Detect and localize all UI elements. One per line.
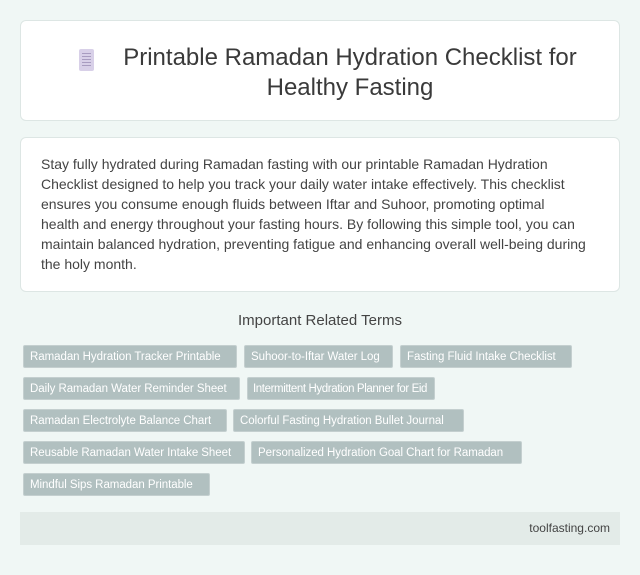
description text: [41, 156, 586, 272]
tags: Intermittent Hydration Planner for Eid: [253, 383, 427, 395]
tags: Mindful Sips Ramadan Printable: [30, 479, 193, 491]
description text: the holy month.: [41, 256, 137, 272]
description panel: [20, 137, 620, 292]
tags: Daily Ramadan Water Reminder Sheet: [30, 383, 227, 395]
tags: Fasting Fluid Intake Checklist: [407, 351, 556, 363]
tags: Suhoor-to-Iftar Water Log: [251, 351, 380, 363]
footer source text: toolfasting.com: [529, 521, 610, 535]
icon: document: [79, 49, 94, 71]
header panel: [20, 20, 620, 121]
title: Printable Ramadan Hydration Checklist for: [123, 44, 577, 71]
tags: Ramadan Hydration Tracker Printable: [30, 351, 221, 363]
title: [123, 44, 577, 101]
tags: Reusable Ramadan Water Intake Sheet: [30, 447, 231, 459]
tags: Colorful Fasting Hydration Bullet Journal: [240, 415, 444, 427]
tags: Ramadan Electrolyte Balance Chart: [30, 415, 211, 427]
title: Healthy Fasting: [267, 74, 433, 101]
description text: ensures you consume enough fluids between Iftar and Suhoor, promoting optimal: [41, 196, 545, 212]
related terms heading: Important Related Terms: [238, 312, 402, 329]
description text: maintain balanced hydration, preventing fatigue and enhancing overall well-being during: [41, 236, 586, 252]
description text: Checklist designed to help you track your daily water intake effectively. This checklist: [41, 176, 565, 192]
description text: health and energy throughout your fasting hours. By following this simple tool, you can: [41, 216, 575, 232]
tags: Personalized Hydration Goal Chart for Ramadan: [258, 447, 503, 459]
footer: [20, 512, 620, 545]
description text: Stay fully hydrated during Ramadan fasting with our printable Ramadan Hydration: [41, 156, 548, 172]
